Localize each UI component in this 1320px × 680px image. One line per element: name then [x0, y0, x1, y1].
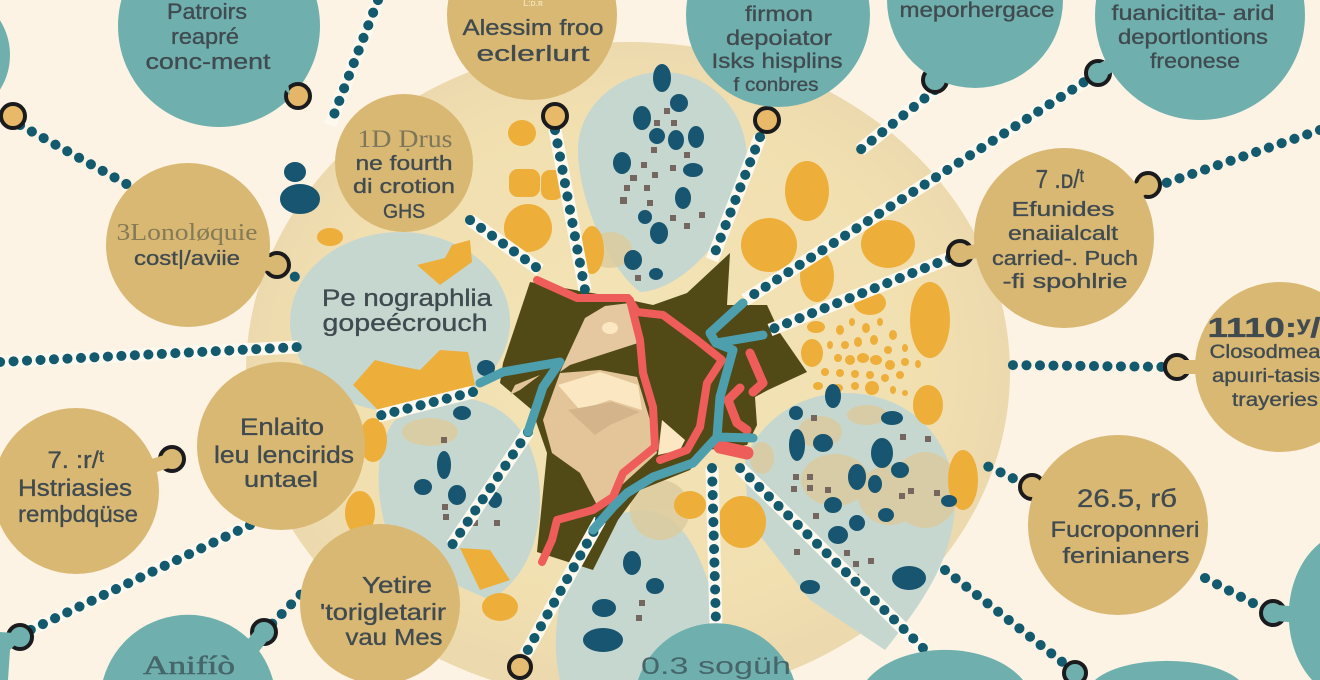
- bubble: Efunides: -fi spohlrie: [1002, 271, 1128, 293]
- bubble: 1110: [1165, 282, 1320, 452]
- label: Pe nographlia: [322, 285, 493, 337]
- bubble: bottom right teal: [867, 650, 1239, 680]
- bubble: Yetire: 'torigletarir: [320, 599, 446, 625]
- bubble: 26.5: [1020, 435, 1208, 615]
- bubble: left edge: [0, 0, 25, 128]
- bubble: Alessim: Alessim froo: [462, 15, 604, 40]
- bubble: Alessim: [447, 0, 617, 128]
- bubble: Efunides: carried-. Puch: [992, 248, 1138, 270]
- bubble: Enlaito: [197, 362, 365, 530]
- bubble: 26.5: ferinianers: [1062, 543, 1190, 568]
- bubble: 3Lonoloquie: 3Lonoløquie: [116, 220, 258, 246]
- population clusters: [281, 65, 956, 651]
- bubble: Yetire: [300, 524, 460, 680]
- bubble: Alessim: eclerlurt: [476, 41, 590, 66]
- bubble: 0.3: [638, 623, 794, 680]
- bubble: 1110: Closodmea: [1210, 342, 1320, 363]
- bubble: meporhergace: [887, 0, 1063, 92]
- bubble: 1D Drus: di crotion: [353, 176, 455, 198]
- bubble: Anifio: [103, 615, 276, 680]
- label: Pe nographlia: gopeécrouch: [322, 310, 488, 337]
- orange map patches: [317, 120, 978, 621]
- bubble: 1110: 1110:ʸ/: [1208, 312, 1320, 343]
- bubble: firmon: Isks hisplins: [712, 50, 842, 73]
- bubble: firmon: f conbres: [734, 75, 818, 96]
- bubble: 1D Drus: [335, 94, 473, 232]
- bubble: 26.5: 26.5, rб: [1077, 485, 1177, 513]
- bubble: fuanicitita: deportlontions: [1118, 26, 1268, 49]
- bubble: Patroirs: [118, 0, 320, 127]
- bubble: Yetire: vau Mes: [346, 624, 442, 650]
- bubble: 1D Drus: ne fourth: [356, 153, 452, 175]
- bubble: Yetire: Yetire: [362, 572, 432, 598]
- bubble: Enlaito: Enlaito: [240, 414, 324, 441]
- bubble: 0.3: 0.3 sogüh: [641, 653, 791, 680]
- bubble: Efunides: Efunides: [1012, 199, 1114, 221]
- bubble: Hstriasies: Hstriasies: [18, 475, 132, 502]
- bubble: Anifio: Anifíò: [143, 651, 235, 680]
- bubble: Efunides: [948, 148, 1160, 328]
- bubble: Hstriasies: 7. :r/ᵗ: [48, 447, 104, 474]
- bubble: Enlaito: untael: [244, 467, 318, 492]
- bubble: Efunides: 7 .ᴅ/ᵗ: [1036, 164, 1084, 194]
- tan patches in regions: [402, 232, 959, 540]
- beige central relief: [510, 303, 685, 505]
- bubble: Hstriasies: [0, 408, 184, 574]
- dark central landmass: [500, 253, 807, 570]
- bubble: Enlaito: leu lencirids: [214, 442, 354, 469]
- bubble: Patroirs: conc-ment: [146, 49, 270, 74]
- bubble: 26.5: Fucroponneri: [1050, 517, 1200, 542]
- bubble: fuanicitita: fuanicitita- arid: [1112, 2, 1274, 25]
- bubble: Patroirs: reapré: [171, 24, 239, 49]
- pale teal regions: [290, 72, 955, 680]
- bubble: firmon: firmon: [745, 3, 813, 26]
- orange dotted field: [813, 318, 921, 396]
- bubble: 1D Drus: 1D Ḍrus: [358, 126, 452, 153]
- red and teal route lines: [480, 280, 763, 562]
- bubble: 1D Drus: GHS: [383, 201, 425, 223]
- bubble: 1110: trayeries: [1232, 390, 1318, 411]
- bubble: Efunides: enaiialcalt: [1008, 223, 1119, 245]
- bubble: far right bottom: [1261, 543, 1320, 680]
- bubble: 1110: apuıri-tasis: [1212, 366, 1320, 387]
- bubble: far left bottom: [0, 625, 32, 680]
- bubble: firmon: [686, 0, 870, 132]
- bubble: 3Lonoloquie: cost|/aviie: [134, 248, 240, 270]
- central backdrop circle: [246, 42, 1010, 680]
- bubble: 3Lonoloquie: [106, 163, 289, 327]
- bubble: Hstriasies: remþdqüse: [18, 501, 138, 527]
- bubble: fuanicitita: [1086, 0, 1305, 120]
- bubble: firmon: depoiator: [726, 27, 832, 50]
- label: Pe nographlia: Pe nographlia: [322, 285, 493, 312]
- bubble: fuanicitita: freonese: [1150, 50, 1240, 73]
- ring: lower centre: [509, 656, 531, 678]
